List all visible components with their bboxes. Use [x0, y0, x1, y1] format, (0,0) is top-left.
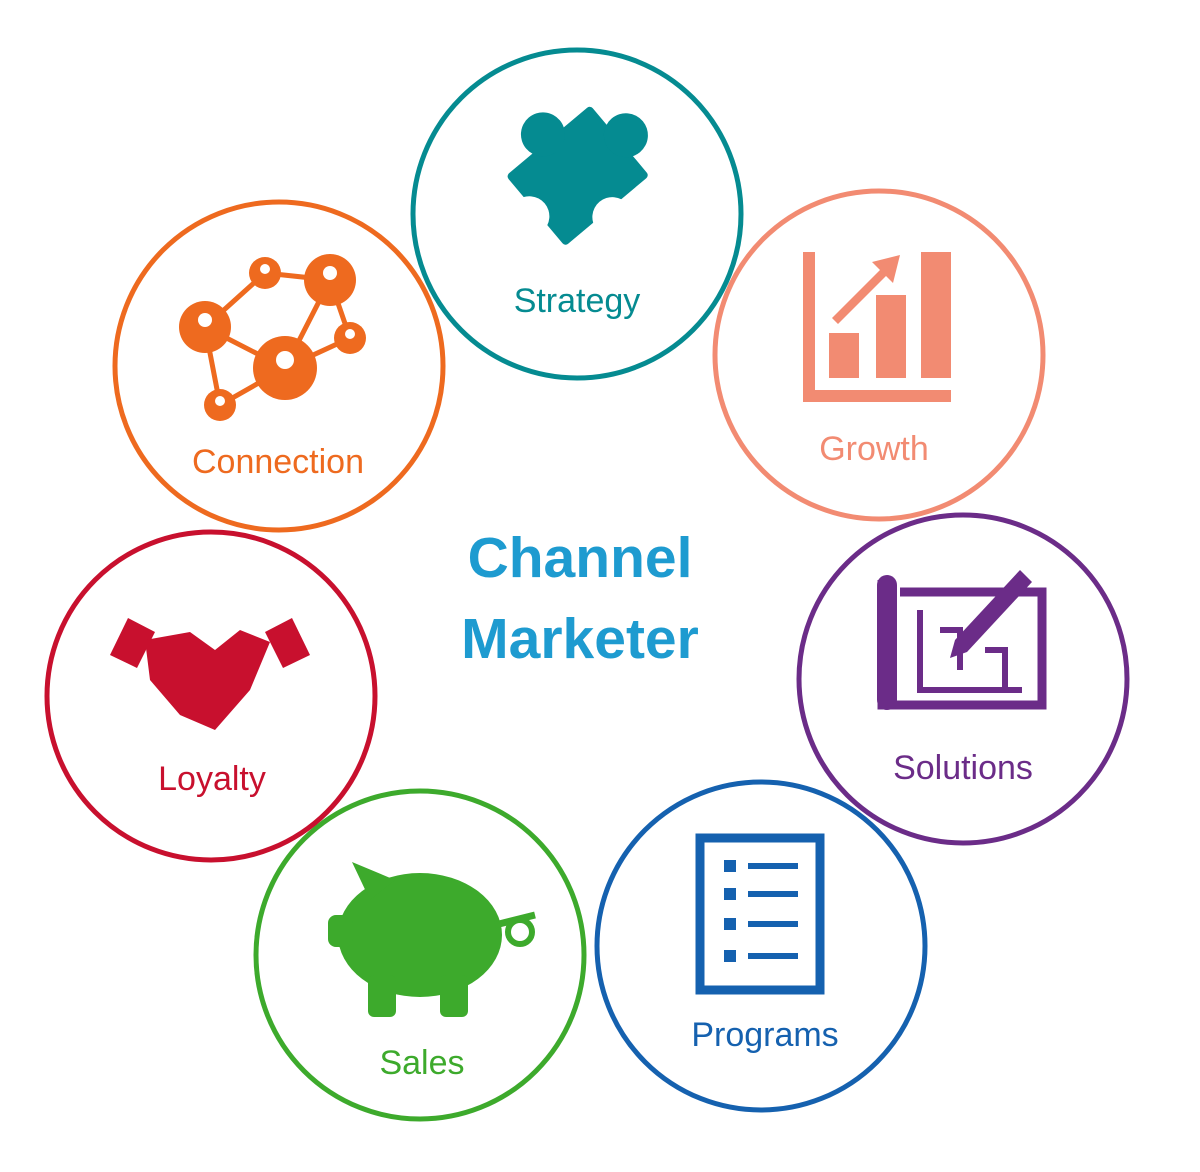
icon: piggy bank	[328, 862, 535, 1017]
label: Programs: Programs	[691, 1016, 839, 1054]
label: Solutions: Solutions	[893, 749, 1033, 787]
icon: puzzle piece	[465, 63, 690, 286]
title: Channel Marketer: Channel	[468, 526, 692, 590]
panel: Programs	[597, 782, 925, 1110]
panel: Solutions	[799, 515, 1127, 843]
icon: blueprint with pencil	[877, 575, 1042, 710]
panel: Loyalty	[47, 532, 375, 860]
label: Connection: Connection	[192, 443, 364, 481]
label: Loyalty: Loyalty	[158, 760, 266, 798]
label: Strategy: Strategy	[514, 282, 640, 320]
icon: handshake	[110, 618, 310, 730]
panel: Sales	[256, 791, 584, 1119]
panel: Growth	[715, 191, 1043, 519]
icon: network of people	[205, 273, 350, 405]
panel: Strategy	[413, 50, 741, 378]
label: Sales: Sales	[379, 1044, 465, 1082]
title: Channel Marketer	[461, 526, 699, 671]
panel: Connection	[115, 202, 443, 530]
icon: growth chart	[803, 252, 951, 402]
title: Channel Marketer: Marketer	[461, 607, 699, 671]
label: Growth: Growth	[819, 430, 929, 468]
icon: checklist	[700, 838, 820, 990]
